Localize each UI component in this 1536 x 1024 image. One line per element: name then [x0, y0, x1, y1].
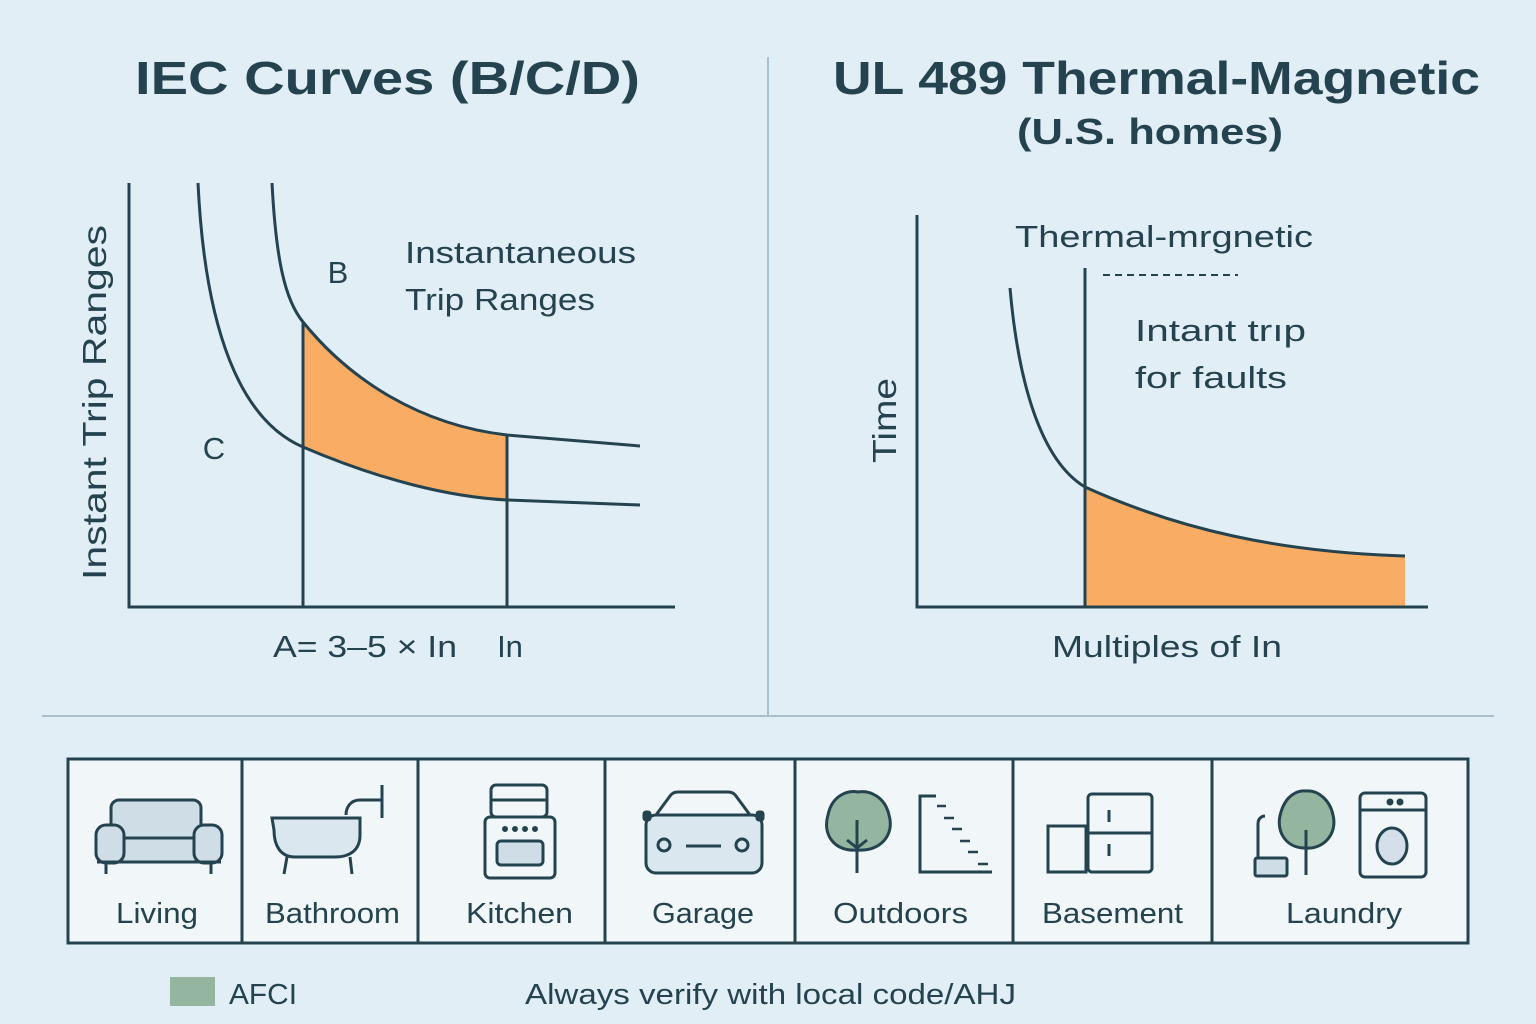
- chart: UL 489: Multiples of In: [1052, 629, 1282, 664]
- legend: AFCI: [170, 977, 297, 1011]
- chart: UL 489: Time: [866, 378, 903, 463]
- chart: IEC curves: [76, 183, 675, 664]
- icon: sofa: [96, 800, 222, 874]
- room labels: Bathroom: [265, 898, 400, 930]
- legend: AFCI: AFCI: [229, 979, 297, 1011]
- title: UL 489: (U.S. homes): [1017, 111, 1283, 152]
- chart: IEC curves: B: [328, 255, 348, 290]
- icon: laundry: [1255, 791, 1426, 877]
- room labels: [116, 898, 1403, 930]
- footnote: Always verify with local code/AHJ: [525, 979, 1016, 1011]
- chart: IEC curves: A= 3–5 × In: [273, 629, 457, 664]
- icon: basement boxes: [1048, 794, 1152, 872]
- title: UL 489: [833, 52, 1480, 152]
- icon: tree and stairs: [827, 792, 992, 873]
- chart: UL 489: Thermal-mrgnetic: [1015, 219, 1313, 254]
- room labels: Laundry: [1286, 898, 1403, 930]
- chart: IEC curves: In: [497, 629, 523, 664]
- icon: car: [644, 792, 763, 873]
- room labels: Garage: [652, 898, 754, 930]
- chart: UL 489: Intant trıp: [1135, 313, 1306, 348]
- title: UL 489: UL 489 Thermal-Magnetic: [833, 52, 1480, 104]
- room labels: Kitchen: [466, 898, 573, 930]
- title: IEC Curves: IEC Curves (B/C/D): [135, 52, 640, 104]
- room labels: Outdoors: [833, 898, 968, 930]
- chart: IEC curves: Instant Trip Ranges: [76, 225, 113, 580]
- chart: UL 489: [866, 215, 1428, 664]
- chart: UL 489: for faults: [1135, 360, 1287, 395]
- icon: stove: [485, 785, 555, 878]
- room labels: Basement: [1042, 898, 1183, 930]
- table: rooms: [68, 759, 1468, 943]
- chart: IEC curves: Trip Ranges: [405, 282, 595, 317]
- icon: bathtub: [272, 785, 382, 874]
- room labels: Living: [116, 898, 198, 930]
- chart: IEC curves: Instantaneous: [405, 235, 636, 270]
- chart: IEC curves: C: [203, 431, 225, 466]
